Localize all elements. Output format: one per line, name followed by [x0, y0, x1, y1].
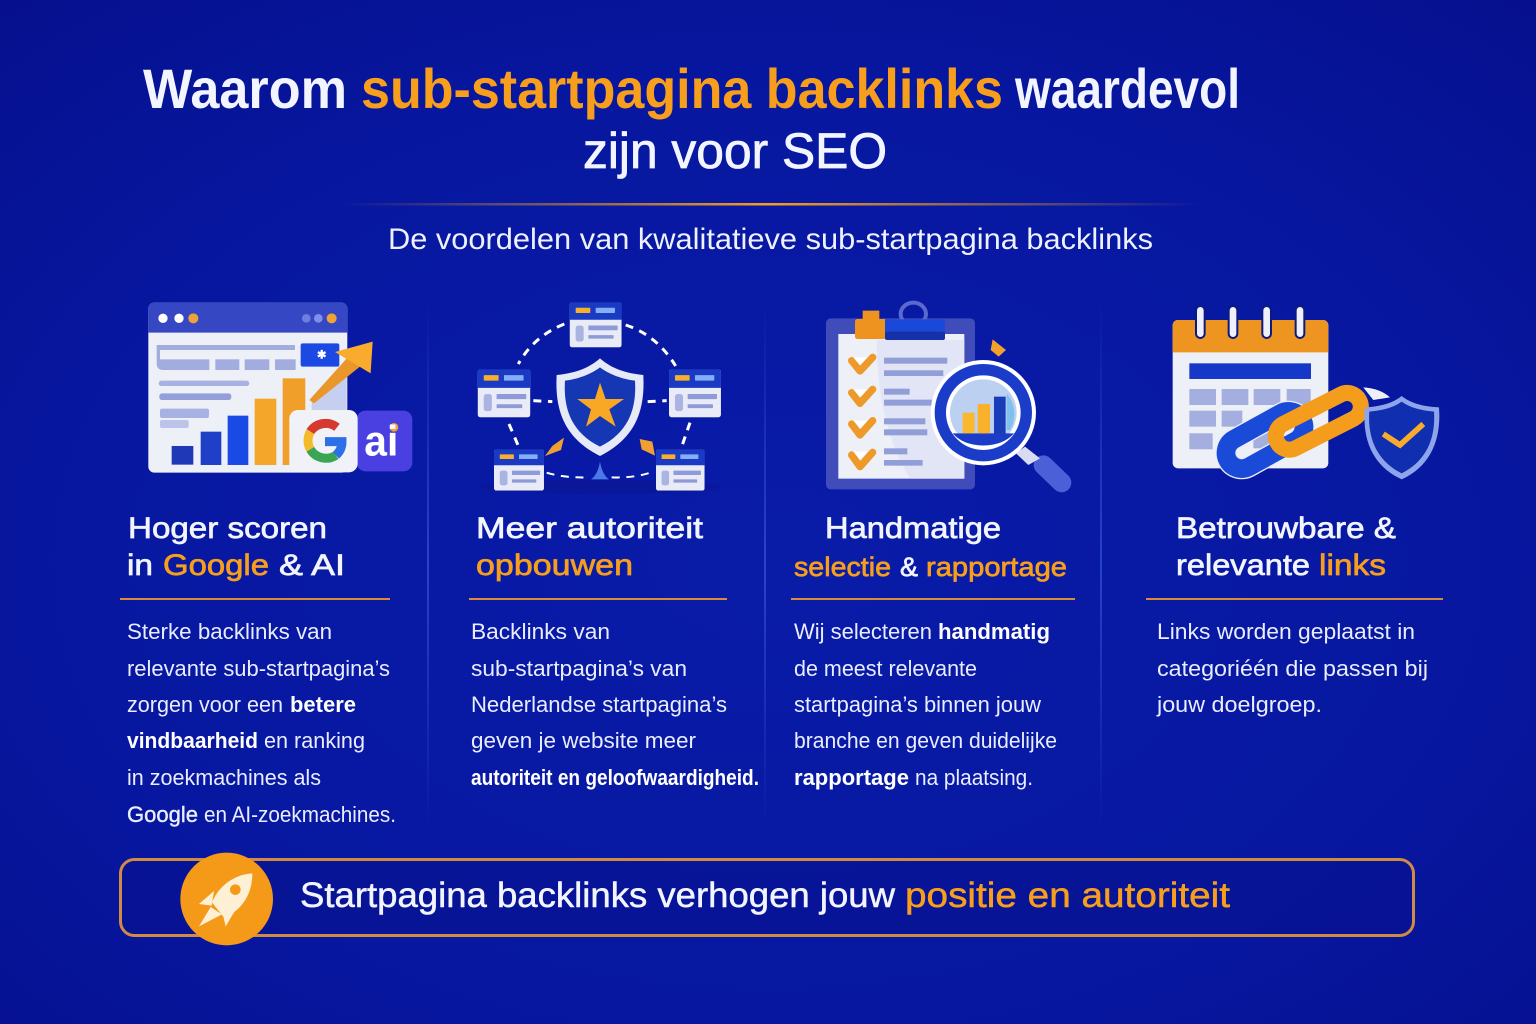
text block: Nederlandse startpagina’s — [471, 692, 727, 717]
text block — [794, 619, 1057, 790]
text block: in zoekmachines als — [127, 765, 321, 790]
text block: na plaatsing. — [915, 765, 1033, 790]
banner text: Startpagina backlinks verhogen jouw — [300, 876, 896, 915]
panel: hoger scoren — [120, 303, 412, 827]
panel: betrouwbare links — [1146, 306, 1443, 717]
heading: Handmatige — [825, 512, 1001, 545]
heading: relevante — [1176, 549, 1310, 582]
text block: en ranking — [264, 728, 365, 753]
heading: rapportage — [926, 552, 1067, 582]
heading: Hoger scoren — [128, 512, 327, 545]
title: zijn voor SEO — [583, 123, 887, 179]
heading: in — [127, 549, 153, 582]
title: waardevol — [1014, 57, 1240, 120]
heading: & — [900, 552, 918, 582]
text block: relevante sub-startpagina’s — [127, 656, 390, 681]
text block: categoriéén die passen bij — [1157, 656, 1428, 681]
heading — [127, 512, 345, 582]
text block: en AI-zoekmachines. — [204, 802, 396, 827]
callout banner — [120, 853, 1414, 945]
text block: Backlinks van — [471, 619, 610, 644]
text block: Links worden geplaatst in — [1157, 619, 1415, 644]
icon: browser chart with Google and AI: ai — [364, 418, 398, 466]
text block: autoriteit en geloofwaardigheid. — [471, 765, 759, 790]
text block — [127, 619, 396, 827]
heading — [1176, 512, 1396, 582]
text block: Wij selecteren — [794, 619, 932, 644]
heading: & AI — [279, 549, 345, 582]
text block: branche en geven duidelijke — [794, 728, 1057, 753]
text block: vindbaarheid — [127, 728, 258, 753]
banner text — [300, 876, 1230, 915]
text block: de meest relevante — [794, 656, 977, 681]
title: sub-startpagina backlinks — [361, 57, 1003, 120]
icon: browser chart with Google and AI: ✱ — [317, 349, 326, 361]
heading: links — [1319, 549, 1386, 582]
panel: handmatige selectie — [791, 303, 1075, 790]
text block: zorgen voor een — [127, 692, 283, 717]
text block: Google — [127, 802, 198, 827]
heading: Betrouwbare & — [1176, 512, 1396, 545]
text block — [1156, 619, 1428, 717]
banner text: positie en autoriteit — [905, 876, 1230, 915]
panel: meer autoriteit — [469, 302, 759, 790]
heading: selectie — [794, 552, 891, 582]
heading: Meer autoriteit — [476, 512, 704, 545]
heading: Google — [163, 549, 269, 582]
text block: betere — [290, 692, 356, 717]
title — [143, 57, 1240, 179]
text block: rapportage — [794, 765, 909, 790]
heading — [476, 512, 704, 582]
icon: browser chart with Google and AI — [148, 303, 412, 473]
text block: geven je website meer — [471, 728, 696, 753]
icon: shield with star and linked pages — [478, 302, 721, 494]
text block: sub-startpagina’s van — [471, 656, 687, 681]
heading: opbouwen — [476, 549, 633, 582]
icon: rocket — [180, 853, 273, 945]
text block: handmatig — [938, 619, 1050, 644]
subtitle: De voordelen van kwalitatieve sub-startpagina backlinks — [388, 223, 1153, 256]
text block: startpagina’s binnen jouw — [794, 692, 1041, 717]
icon: calendar with chain link and shield — [1173, 306, 1439, 479]
text block: jouw doelgroep. — [1156, 692, 1322, 717]
heading — [794, 512, 1067, 582]
icon: clipboard with magnifier — [826, 303, 1062, 489]
text block — [471, 619, 759, 790]
text block: Sterke backlinks van — [127, 619, 332, 644]
title: Waarom — [143, 57, 347, 120]
